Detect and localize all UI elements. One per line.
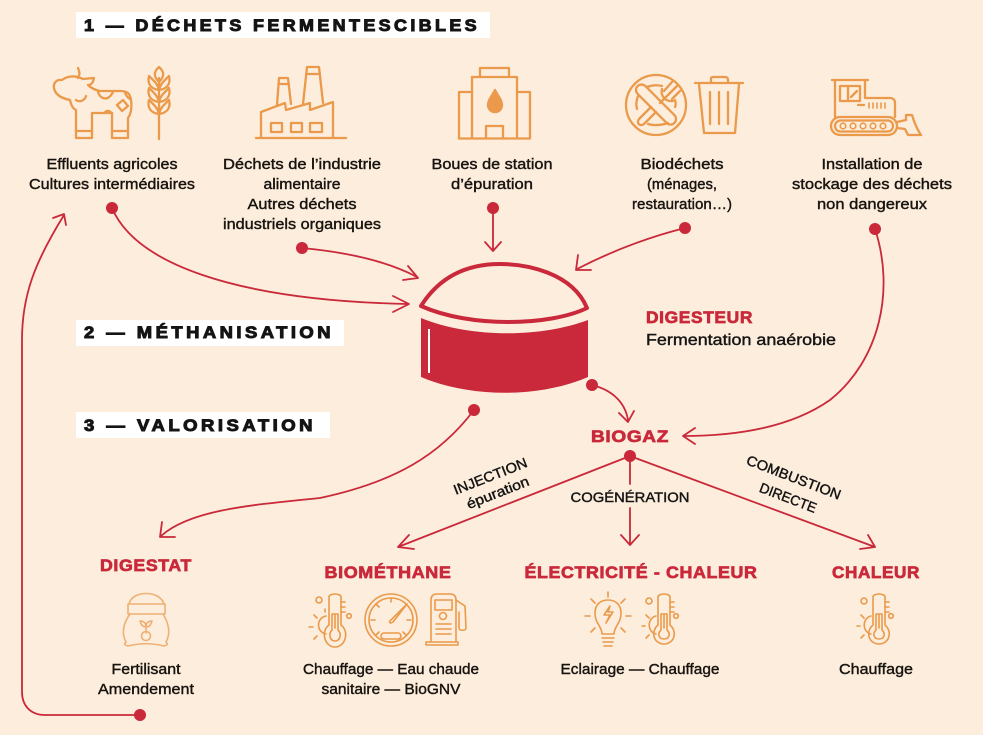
heading: biométhane: BIOMÉTHANE — [324, 563, 452, 582]
text: boues de station — [432, 156, 552, 193]
arrow: digester to digestat — [160, 404, 480, 537]
text: déchets industrie — [223, 156, 381, 233]
arrow: combustion — [630, 456, 875, 549]
label: injection épuration: épuration — [464, 473, 531, 512]
text: chauffage eau chaude biognv: sanitaire — BioGNV — [322, 681, 460, 698]
text: biodéchets: (ménages, — [647, 176, 717, 193]
text: déchets industrie: industriels organiques — [223, 216, 381, 233]
text: biodéchets: Biodéchets — [640, 156, 724, 173]
heading: 1 déchets fermentescibles — [76, 12, 490, 38]
label: digesteur: Fermentation anaérobie — [646, 332, 836, 349]
digester dome — [421, 264, 587, 322]
heading: électricité chaleur: ÉLECTRICITÉ - CHALEUR — [524, 563, 758, 582]
text: biodéchets — [632, 156, 732, 213]
heading: chaleur: CHALEUR — [832, 563, 920, 582]
text: installation de stockage: non dangereux — [817, 196, 928, 213]
text: déchets industrie: Déchets de l’industrie — [223, 156, 381, 173]
icon: trash bin — [695, 77, 743, 133]
icon: gauge — [365, 594, 417, 646]
arrow: injection — [398, 456, 630, 549]
icon: bulldozer — [831, 80, 921, 135]
icon: thermometer sun 2 — [642, 594, 678, 644]
heading: 2 méthanisation: 2 — MÉTHANISATION — [84, 323, 334, 342]
text: éclairage chauffage: Eclairage — Chauffage — [560, 661, 720, 678]
text: chauffage eau chaude biognv — [303, 661, 479, 698]
heading: digestat: DIGESTAT — [100, 556, 192, 575]
label: injection épuration — [451, 454, 536, 514]
text: effluents agricoles: Cultures intermédiaires — [29, 176, 195, 193]
label: cogénération: COGÉNÉRATION — [570, 489, 690, 505]
label: combustion directe: DIRECTE — [757, 479, 819, 516]
icon: crossed-out plate and cutlery — [626, 75, 686, 135]
arrow: biodéchets to digester — [576, 222, 691, 270]
arrows: biogaz branches — [398, 450, 875, 549]
arrow: industry to digester — [296, 242, 418, 280]
arrow: boues to digester — [485, 202, 501, 251]
heading: 3 valorisation — [76, 412, 330, 438]
icon: wheat — [148, 67, 170, 139]
arrow: digester to biogaz — [586, 379, 634, 422]
label: combustion directe — [737, 452, 843, 522]
text: chauffage: Chauffage — [839, 661, 913, 678]
text: déchets industrie: Autres déchets — [248, 196, 356, 213]
heading: 1 déchets fermentescibles: 1 — DÉCHETS FERMENTESCIBLES — [84, 16, 480, 35]
label: combustion directe: COMBUSTION — [744, 452, 843, 503]
text: biodéchets: restauration…) — [632, 196, 732, 213]
icon: factory — [256, 67, 346, 138]
label: digesteur — [646, 308, 836, 349]
digester — [421, 264, 588, 393]
icon: fuel pump — [426, 594, 466, 645]
text: effluents agricoles: Effluents agricoles — [46, 156, 178, 173]
text: installation de stockage: stockage des déchets — [792, 176, 952, 193]
icon: cow — [54, 68, 131, 138]
icon: light bulb — [585, 592, 631, 646]
digester tank — [421, 318, 588, 393]
text: effluents agricoles — [29, 156, 195, 193]
text: fertilisant amendement: Amendement — [98, 681, 195, 698]
label: injection épuration: INJECTION — [451, 454, 529, 498]
arrow: cogénération — [621, 456, 639, 545]
text: chauffage eau chaude biognv: Chauffage — Eau chaude — [303, 661, 479, 678]
heading: 3 valorisation: 3 — VALORISATION — [84, 416, 316, 435]
text: installation de stockage: Installation de — [822, 156, 922, 173]
label: digesteur: DIGESTEUR — [646, 308, 753, 327]
label: biogaz: BIOGAZ — [591, 427, 669, 446]
text: fertilisant amendement — [98, 661, 195, 698]
icon: treatment plant with drop — [459, 68, 530, 138]
text: déchets industrie: alimentaire — [264, 176, 340, 193]
heading: 2 méthanisation — [76, 320, 344, 346]
arrow: effluents to digester — [106, 202, 409, 312]
text: boues de station: d’épuration — [451, 176, 533, 193]
text: fertilisant amendement: Fertilisant — [112, 661, 181, 678]
icon: thermometer sun 3 — [857, 594, 893, 644]
icon: fertiliser sack — [123, 594, 169, 646]
arrow: digestat back to effluents — [22, 214, 146, 721]
icon: thermometer sun 1 — [309, 594, 351, 647]
arrow: stockage to biogaz — [683, 223, 884, 444]
text: boues de station: Boues de station — [432, 156, 552, 173]
text: installation de stockage — [792, 156, 952, 213]
